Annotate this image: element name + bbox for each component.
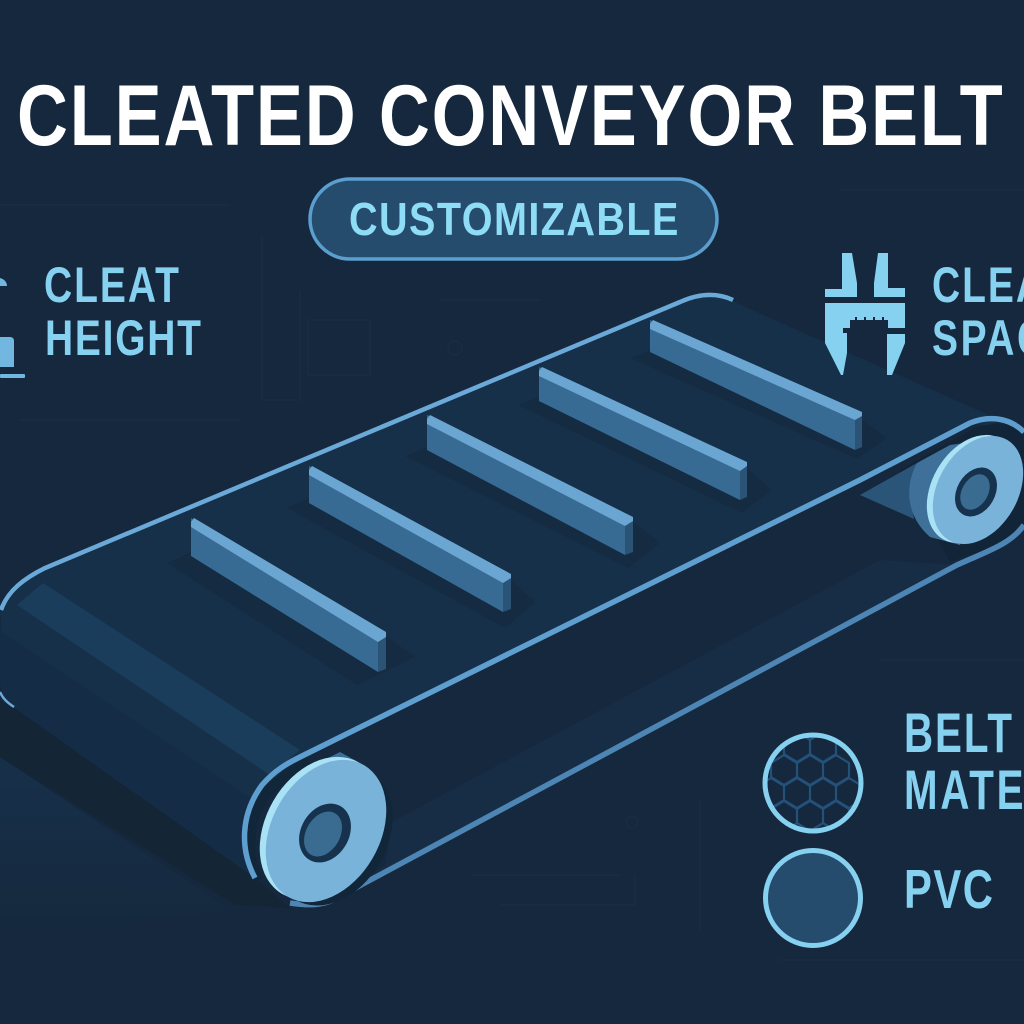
- badge: customizable: CUSTOMIZABLE: [349, 194, 678, 246]
- far roller dark surround: [900, 424, 1024, 562]
- belt left lower outline: [0, 692, 14, 707]
- label: cleat height: [44, 256, 201, 366]
- ground tone under belt: [0, 757, 230, 940]
- near roller: [235, 735, 417, 927]
- inner wedge near far roller: [860, 463, 917, 519]
- title: CLEATED CONVEYOR BELT: [17, 67, 1003, 164]
- label: pvc: PVC: [904, 860, 993, 920]
- cleat 5: [630, 320, 887, 459]
- belt left outer face: [0, 625, 255, 878]
- belt top surface: [0, 296, 1000, 798]
- icon: hex material: [758, 732, 862, 831]
- dark gap around near roller: [250, 762, 310, 880]
- cleat 1: [167, 518, 415, 685]
- far roller: [908, 419, 1024, 560]
- lower belt strip: [345, 560, 957, 893]
- cleat 2: [287, 466, 535, 628]
- belt top edge outline: [1, 295, 733, 610]
- cleat 4: [518, 367, 772, 513]
- icon: pvc swatch: [766, 850, 860, 946]
- belt return edge and wrap: [290, 525, 1024, 905]
- far roller cylinder: [909, 440, 985, 545]
- lighter belt band: [17, 583, 300, 775]
- belt front edge and far wrap: [245, 419, 1024, 878]
- label: cleat height: HEIGHT: [45, 309, 201, 366]
- label: cleat height: CLEAT: [44, 256, 179, 313]
- icon: caliper: [825, 253, 905, 375]
- label: belt material: [904, 703, 1024, 822]
- icon: cleat height: [0, 278, 25, 378]
- lower shadow band: [0, 700, 290, 908]
- label: belt material: BELT: [904, 703, 1012, 765]
- return belt underside: [280, 423, 1024, 900]
- cleat 3: [405, 415, 660, 568]
- badge: customizable: [310, 179, 717, 259]
- label: cleat spacing: [932, 256, 1024, 366]
- conveyor belt: [0, 295, 1024, 940]
